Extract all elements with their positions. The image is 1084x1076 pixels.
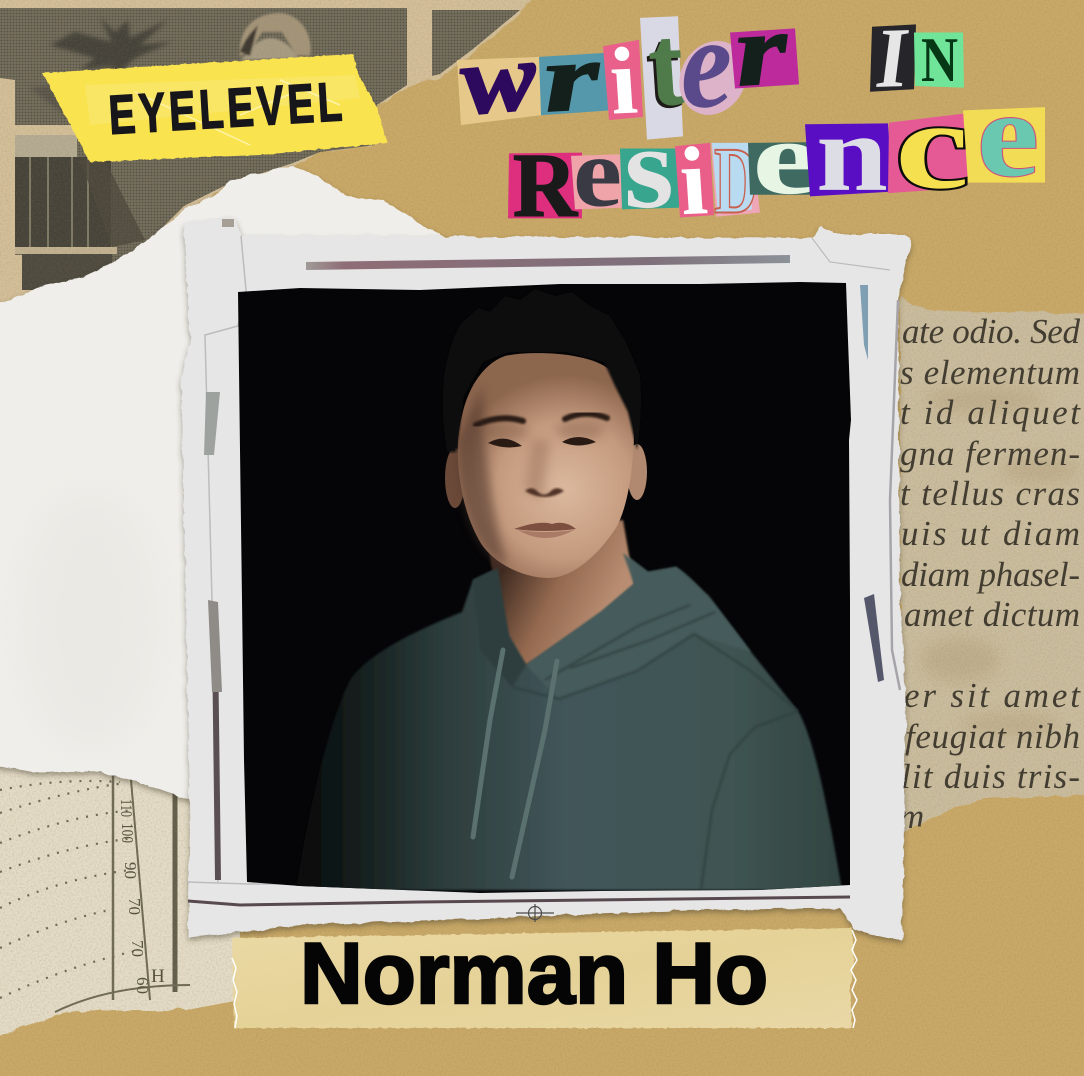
- bookshelf with books: [15, 157, 145, 290]
- frame crease shadows: [187, 236, 900, 884]
- page text lines: t tellus cras: [900, 474, 1080, 513]
- hoodie body: [296, 553, 842, 890]
- page text lines: m: [899, 797, 924, 836]
- chart scale numbers: 100: [118, 823, 137, 843]
- title word: residence: e: [752, 100, 820, 216]
- eyes: [488, 437, 596, 447]
- title word: writer: t: [643, 4, 684, 132]
- white paper sheet: [0, 165, 450, 800]
- frame pen marks: [188, 219, 884, 905]
- kraft torn over page bottom: [896, 796, 1084, 900]
- page text lines: amet dictum: [904, 595, 1080, 634]
- nose shading: [524, 440, 550, 500]
- title: writer in residence: [455, 0, 1045, 236]
- name: Norman Ho: [300, 926, 768, 1022]
- title word: writer: r: [539, 23, 605, 133]
- page text lines: er sit amet: [904, 676, 1081, 715]
- hood collar: [526, 553, 751, 699]
- title word: in: I: [873, 10, 912, 106]
- title word: writer: [455, 0, 799, 140]
- page text lines: s elementum: [900, 353, 1080, 392]
- face shadow, left: [458, 385, 508, 566]
- title word: residence: n: [816, 92, 888, 214]
- text page, right side: [896, 297, 1084, 900]
- page text lines: feugiat nibh: [905, 717, 1080, 756]
- neck: [488, 520, 634, 665]
- title word: residence: i: [676, 127, 710, 236]
- title word: in: N: [921, 26, 958, 95]
- vintage newspaper photo, top left: [0, 0, 540, 312]
- portrait photo: [230, 275, 860, 900]
- page text lines: t id aliquet: [900, 393, 1081, 432]
- title word: residence: e: [977, 67, 1039, 202]
- pale shelf backing: [15, 135, 77, 157]
- hair: [446, 353, 640, 454]
- title word: residence: [508, 67, 1045, 236]
- eye socket shading: [481, 420, 604, 442]
- page text lines: diam phasel-: [901, 555, 1080, 594]
- page text lines: ate odio. Sed: [902, 312, 1080, 351]
- chart scale numbers: [117, 799, 165, 994]
- title word: writer: i: [607, 28, 640, 135]
- mouth: [514, 523, 576, 538]
- nose: [525, 488, 564, 497]
- chart scale numbers: 70: [125, 898, 144, 915]
- vintage chart page, bottom left: [0, 755, 240, 1045]
- face: [458, 353, 634, 578]
- title word: residence: D: [714, 128, 758, 234]
- eyebrows: [476, 414, 607, 425]
- title word: residence: s: [624, 102, 674, 233]
- woman's head in photo: [240, 13, 311, 60]
- page text lines: gna fermen-: [900, 434, 1080, 473]
- page text lines: lit duis tris-: [901, 757, 1080, 796]
- title word: writer: w: [455, 23, 544, 135]
- title word: in: [870, 10, 964, 106]
- chart scale numbers: 70: [128, 940, 147, 957]
- chart scale numbers: 110: [117, 799, 136, 817]
- chart scale numbers: 90: [121, 862, 140, 879]
- title word: residence: R: [513, 136, 578, 236]
- title word: residence: e: [573, 118, 622, 228]
- page text lines: uis ut diam: [901, 514, 1080, 553]
- hoodie seams and folds: [512, 605, 798, 890]
- title word: writer: t: [645, 2, 687, 129]
- bottom kraft torn edge: [0, 950, 880, 1076]
- chart scale numbers: 60: [133, 977, 152, 994]
- dotted arcs: [0, 781, 140, 998]
- chart scale numbers: H: [151, 966, 165, 987]
- ears: [445, 444, 647, 508]
- plant silhouette: [30, 18, 172, 125]
- title word: residence: c: [895, 75, 969, 215]
- logo text: EYELEVEL: [107, 72, 344, 147]
- torn photo frame: [181, 217, 911, 940]
- chart rules: [55, 775, 190, 1012]
- yellow tape logo: [42, 54, 387, 162]
- page text lines: [899, 312, 1081, 836]
- registration crosshair: [516, 904, 554, 922]
- name strip: [232, 926, 857, 1028]
- hoodie drawstrings: [473, 650, 557, 877]
